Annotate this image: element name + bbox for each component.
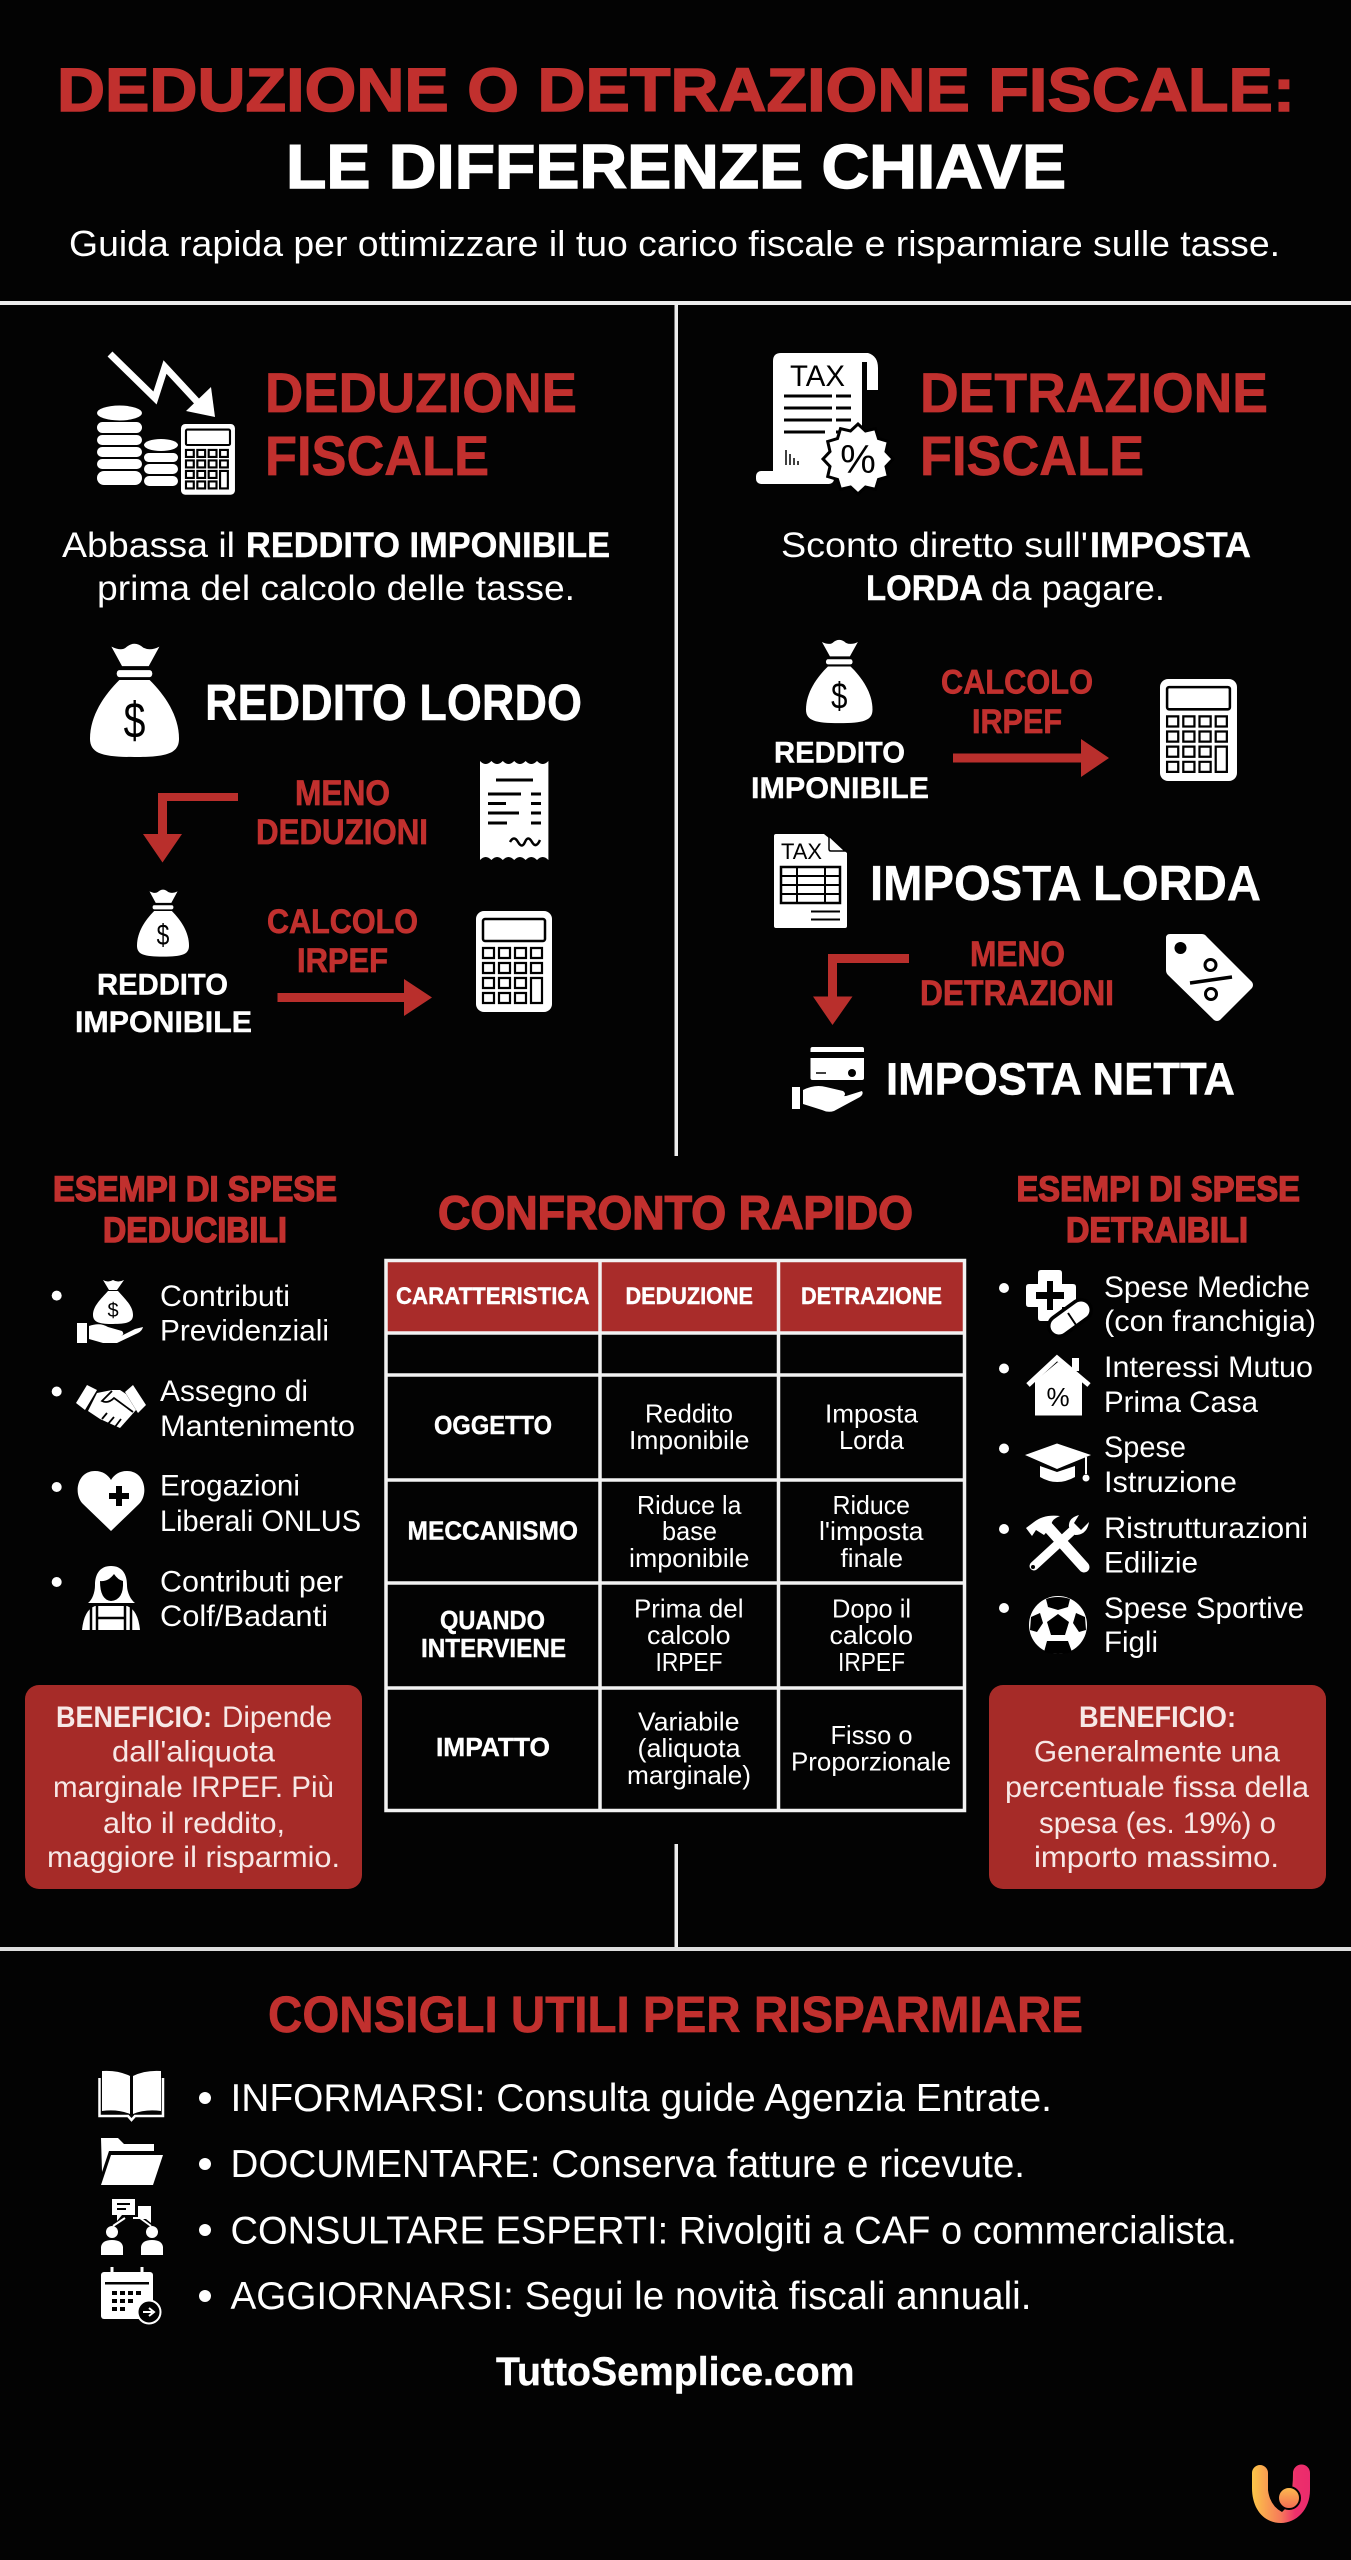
heading: deduzione fiscale: FISCALE bbox=[265, 424, 489, 487]
list text: assegno di mantenimento: Assegno di bbox=[160, 1375, 308, 1408]
list item: assegno di mantenimento bbox=[52, 1375, 355, 1443]
row: meccanismo: imponibile bbox=[629, 1543, 750, 1573]
row: impatto: Variabile bbox=[638, 1706, 740, 1736]
heading: spese deducibili: DEDUCIBILI bbox=[103, 1211, 287, 1250]
row: oggetto: Imponibile bbox=[629, 1425, 750, 1455]
row: quando interviene: IRPEF bbox=[838, 1647, 905, 1677]
arrow: calcolo bbox=[953, 739, 1109, 777]
heading: spese deducibili: ESEMPI DI SPESE bbox=[53, 1170, 337, 1209]
label: calcolo irpef: CALCOLO bbox=[267, 903, 418, 941]
row: oggetto: Imposta bbox=[825, 1398, 919, 1428]
list text: spese mediche bbox=[1104, 1271, 1316, 1338]
tip: aggiornarsi bbox=[101, 2267, 1032, 2324]
row: meccanismo bbox=[408, 1490, 924, 1573]
list text: contributi previdenziali bbox=[160, 1280, 329, 1348]
list text: erogazioni liberali: Erogazioni bbox=[160, 1470, 300, 1502]
tip: consultare esperti: CONSULTARE ESPERTI: Rivolgiti a CAF o commercialista. bbox=[230, 2210, 1237, 2252]
label: calcolo irpef: CALCOLO bbox=[941, 664, 1093, 702]
label: reddito imponibile: REDDITO bbox=[774, 736, 905, 770]
list text: spese sportive: Figli bbox=[1104, 1626, 1158, 1659]
callout: beneficio detrazione: BENEFICIO: bbox=[1079, 1701, 1236, 1734]
row: meccanismo: Riduce bbox=[832, 1490, 910, 1520]
label: calcolo irpef: IRPEF bbox=[972, 703, 1062, 741]
icon: money bag: $ bbox=[831, 677, 848, 718]
list text: ristrutturazioni: Ristrutturazioni bbox=[1104, 1512, 1308, 1545]
label: calcolo irpef: IRPEF bbox=[297, 942, 388, 980]
icon: calculator bbox=[476, 911, 552, 1012]
label: meno deduzioni: MENO bbox=[295, 774, 390, 813]
callout: beneficio deduzione: BENEFICIO: bbox=[56, 1701, 212, 1734]
title: LE DIFFERENZE CHIAVE bbox=[286, 133, 1066, 202]
list text: spese sportive bbox=[1104, 1592, 1304, 1659]
callout: beneficio deduzione: marginale IRPEF. Più bbox=[53, 1771, 334, 1804]
heading: spese detraibili bbox=[1016, 1170, 1300, 1250]
list text: spese istruzione: Istruzione bbox=[1104, 1466, 1237, 1499]
icon: card in hand bbox=[792, 1047, 864, 1112]
list text: spese sportive: Spese Sportive bbox=[1104, 1592, 1304, 1625]
label: meno detrazioni bbox=[920, 935, 1114, 1013]
list item: contributi colf badanti bbox=[52, 1566, 343, 1633]
icon: calendar bbox=[101, 2267, 160, 2324]
list text: interessi mutuo: Prima Casa bbox=[1104, 1386, 1258, 1419]
heading: consigli utili: CONSIGLI UTILI PER RISPARMIARE bbox=[268, 1986, 1083, 2043]
callout: beneficio deduzione bbox=[25, 1685, 362, 1889]
row: oggetto: OGGETTO bbox=[434, 1410, 552, 1440]
row: quando interviene: calcolo bbox=[647, 1620, 730, 1650]
label: calcolo irpef bbox=[267, 903, 418, 980]
label: reddito imponibile: REDDITO bbox=[97, 968, 228, 1002]
table header bbox=[396, 1283, 942, 1310]
tip: consultare esperti bbox=[101, 2199, 1237, 2255]
heading: detrazione fiscale bbox=[920, 361, 1268, 487]
label: meno deduzioni bbox=[256, 774, 428, 852]
callout: beneficio detrazione: percentuale fissa della bbox=[1005, 1771, 1309, 1804]
list text: spese istruzione: Spese bbox=[1104, 1431, 1186, 1464]
comparison table bbox=[386, 1260, 965, 1811]
label: reddito imponibile: IMPONIBILE bbox=[751, 772, 929, 805]
label: meno detrazioni: MENO bbox=[970, 935, 1065, 974]
list item: erogazioni liberali bbox=[52, 1470, 361, 1538]
list text: interessi mutuo: Interessi Mutuo bbox=[1104, 1351, 1313, 1384]
icon: tax document with percent badge bbox=[756, 353, 893, 494]
list item: interessi mutuo: % bbox=[1046, 1382, 1070, 1412]
label: reddito lordo: REDDITO LORDO bbox=[205, 674, 582, 731]
list text: spese istruzione bbox=[1104, 1431, 1237, 1499]
description: detrazione: Sconto diretto sull' bbox=[781, 526, 1088, 565]
description: deduzione: REDDITO IMPONIBILE bbox=[246, 526, 610, 565]
description: detrazione: IMPOSTA bbox=[1090, 526, 1251, 565]
callout: beneficio detrazione: importo massimo. bbox=[1034, 1841, 1279, 1874]
description: deduzione: prima del calcolo delle tasse. bbox=[97, 569, 575, 608]
list text: contributi colf badanti: Contributi per bbox=[160, 1566, 343, 1598]
icon: tax document with percent badge: % bbox=[840, 438, 876, 482]
tip: aggiornarsi: AGGIORNARSI: Segui le novità fiscali annuali. bbox=[230, 2275, 1032, 2318]
list text: spese mediche: Spese Mediche bbox=[1104, 1271, 1310, 1304]
row: quando interviene bbox=[421, 1594, 913, 1677]
arrow: calcolo bbox=[278, 979, 432, 1016]
label: meno deduzioni: DEDUZIONI bbox=[256, 813, 428, 852]
row: quando interviene: calcolo bbox=[830, 1620, 913, 1650]
icon: small money bag bbox=[137, 890, 189, 957]
heading: spese detraibili: DETRAIBILI bbox=[1066, 1211, 1248, 1250]
row: impatto: IMPATTO bbox=[436, 1732, 550, 1762]
heading: detrazione fiscale: DETRAZIONE bbox=[920, 361, 1268, 424]
list text: interessi mutuo bbox=[1104, 1351, 1313, 1419]
subtitle: Guida rapida per ottimizzare il tuo carico fiscale e risparmiare sulle tasse. bbox=[69, 223, 1280, 264]
row: oggetto bbox=[434, 1398, 919, 1455]
table header: CARATTERISTICA bbox=[396, 1283, 590, 1310]
label: reddito imponibile bbox=[751, 736, 929, 805]
row: meccanismo: l'imposta bbox=[819, 1516, 924, 1546]
label: meno detrazioni: DETRAZIONI bbox=[920, 974, 1114, 1013]
callout: beneficio deduzione: alto il reddito, bbox=[103, 1807, 285, 1840]
callout: beneficio deduzione: maggiore il risparmio. bbox=[47, 1841, 340, 1874]
heading: deduzione fiscale bbox=[265, 361, 577, 487]
title bbox=[57, 56, 1295, 202]
list text: contributi previdenziali: Previdenziali bbox=[160, 1314, 329, 1348]
description: detrazione: da pagare. bbox=[991, 569, 1165, 608]
heading: spese deducibili bbox=[53, 1170, 337, 1250]
icon: money bag bbox=[90, 644, 179, 757]
panel: esempi di spese detraibili bbox=[989, 1170, 1326, 1889]
list text: spese mediche: (con franchigia) bbox=[1104, 1305, 1316, 1338]
callout: beneficio detrazione: spesa (es. 19%) o bbox=[1039, 1807, 1276, 1840]
icon: people consulting bbox=[101, 2199, 163, 2255]
description: detrazione: LORDA bbox=[866, 569, 983, 608]
description: deduzione bbox=[62, 526, 610, 608]
list item: contributi previdenziali bbox=[52, 1280, 329, 1348]
list item: spese istruzione bbox=[999, 1431, 1237, 1499]
panel: consigli utili bbox=[100, 1986, 1237, 2324]
panel: detrazione fiscale bbox=[751, 353, 1268, 1112]
row: meccanismo: Riduce la bbox=[637, 1490, 742, 1520]
list text: assegno di mantenimento bbox=[160, 1375, 355, 1443]
label: reddito imponibile: IMPONIBILE bbox=[75, 1006, 252, 1039]
label: calcolo irpef bbox=[941, 664, 1093, 741]
list text: erogazioni liberali bbox=[160, 1470, 361, 1538]
icon: small money bag: $ bbox=[157, 918, 170, 952]
icon: book bbox=[100, 2071, 163, 2120]
list item: ristrutturazioni bbox=[999, 1512, 1308, 1580]
row: impatto: marginale) bbox=[627, 1760, 751, 1790]
row: impatto: Fisso o bbox=[830, 1720, 912, 1750]
list text: assegno di mantenimento: Mantenimento bbox=[160, 1410, 355, 1443]
icon: money bag bbox=[806, 640, 872, 723]
heading: spese detraibili: ESEMPI DI SPESE bbox=[1016, 1170, 1300, 1209]
list item: interessi mutuo bbox=[999, 1351, 1313, 1419]
icon: coins, calculator and falling arrow bbox=[97, 354, 235, 495]
row: meccanismo: finale bbox=[840, 1543, 903, 1573]
list text: ristrutturazioni: Edilizie bbox=[1104, 1546, 1198, 1580]
icon: money bag: $ bbox=[124, 692, 145, 749]
icon: folder bbox=[101, 2138, 163, 2185]
callout: beneficio detrazione: Generalmente una bbox=[1034, 1736, 1280, 1768]
row: quando interviene: QUANDO bbox=[440, 1605, 545, 1635]
heading: deduzione fiscale: DEDUZIONE bbox=[265, 361, 577, 424]
row: quando interviene: Dopo il bbox=[832, 1594, 911, 1624]
row: oggetto: Reddito bbox=[645, 1398, 733, 1428]
list text: ristrutturazioni bbox=[1104, 1512, 1308, 1580]
icon: tax document with percent badge: TAX bbox=[790, 360, 845, 393]
icon: percent tag bbox=[1166, 934, 1253, 1021]
list text: contributi colf badanti bbox=[160, 1566, 343, 1633]
heading: detrazione fiscale: FISCALE bbox=[920, 424, 1144, 487]
title: DEDUZIONE O DETRAZIONE FISCALE: bbox=[57, 56, 1295, 124]
row: impatto bbox=[436, 1706, 951, 1790]
list item: spese sportive bbox=[999, 1592, 1304, 1659]
list text: erogazioni liberali: Liberali ONLUS bbox=[160, 1505, 361, 1538]
row: quando interviene: INTERVIENE bbox=[421, 1633, 566, 1663]
row: quando interviene: IRPEF bbox=[656, 1647, 722, 1677]
arrow: meno detrazioni bbox=[813, 954, 909, 1025]
callout: beneficio deduzione: Dipende bbox=[222, 1701, 332, 1734]
row: meccanismo: MECCANISMO bbox=[408, 1516, 578, 1546]
label: reddito imponibile bbox=[75, 968, 252, 1039]
table header: DEDUZIONE bbox=[626, 1283, 753, 1310]
row: oggetto: Lorda bbox=[839, 1425, 905, 1455]
description: detrazione bbox=[781, 526, 1251, 608]
row: impatto: Proporzionale bbox=[791, 1746, 951, 1776]
icon: tax form bbox=[774, 834, 847, 928]
list item: contributi previdenziali: $ bbox=[107, 1300, 119, 1322]
label: imposta netta: IMPOSTA NETTA bbox=[886, 1054, 1235, 1104]
panel: confronto rapido bbox=[386, 1186, 965, 1811]
icon: calculator bbox=[1160, 679, 1237, 781]
description: deduzione: Abbassa il bbox=[62, 526, 235, 565]
table header: DETRAZIONE bbox=[801, 1283, 942, 1310]
callout: beneficio deduzione: dall'aliquota bbox=[112, 1736, 275, 1768]
row: quando interviene: Prima del bbox=[634, 1594, 744, 1624]
panel: deduzione fiscale bbox=[62, 354, 610, 1039]
icon: receipt bbox=[480, 761, 548, 860]
arrow: meno deduzioni bbox=[143, 793, 238, 862]
icon: tax form: TAX bbox=[781, 839, 822, 864]
label: imposta lorda: IMPOSTA LORDA bbox=[870, 857, 1261, 911]
list text: contributi colf badanti: Colf/Badanti bbox=[160, 1600, 328, 1633]
panel: esempi di spese deducibili bbox=[25, 1170, 362, 1889]
callout: beneficio detrazione bbox=[989, 1685, 1326, 1889]
list item: spese mediche bbox=[999, 1270, 1316, 1338]
heading: confronto rapido: CONFRONTO RAPIDO bbox=[438, 1186, 913, 1239]
logo bbox=[1252, 2465, 1310, 2523]
row: impatto: (aliquota bbox=[638, 1733, 741, 1763]
list text: contributi previdenziali: Contributi bbox=[160, 1280, 290, 1313]
website url: TuttoSemplice.com bbox=[496, 2350, 854, 2394]
tip: informarsi: INFORMARSI: Consulta guide Agenzia Entrate. bbox=[230, 2077, 1052, 2120]
tip: documentare: DOCUMENTARE: Conserva fatture e ricevute. bbox=[230, 2143, 1025, 2186]
row: meccanismo: base bbox=[662, 1516, 717, 1546]
